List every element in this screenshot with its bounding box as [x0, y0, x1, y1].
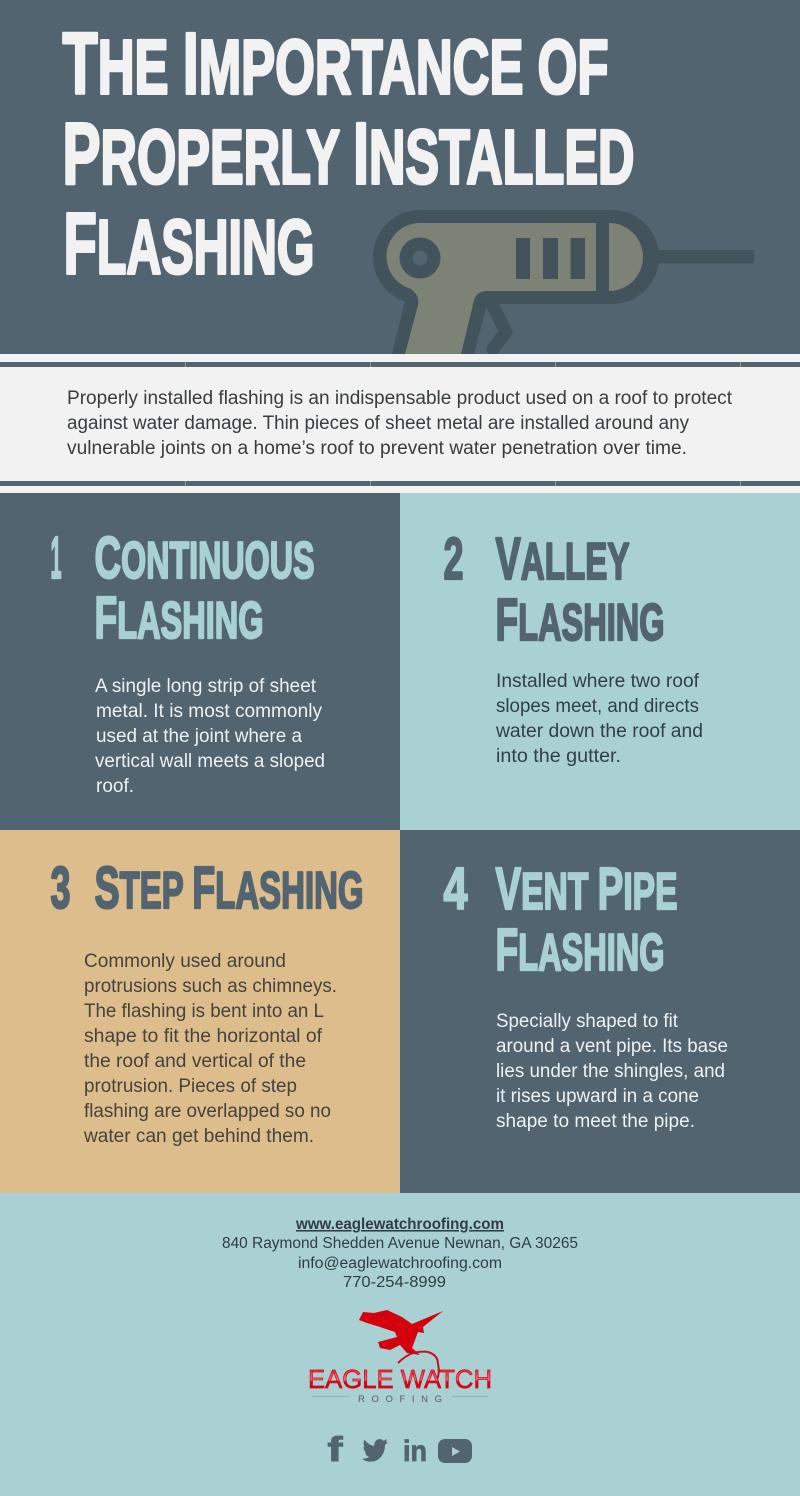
text: vent pipe flashing description: around a vent pipe. Its base	[496, 1036, 728, 1057]
text: step flashing description: protrusions such as chimneys.	[84, 976, 337, 997]
text: valley flashing description: into the gutter.	[496, 746, 621, 767]
text: vent pipe flashing description	[496, 1011, 728, 1132]
heading: 2 valley flashing: VALLEY	[496, 525, 630, 592]
text: valley flashing description: water down the roof and	[495, 721, 703, 742]
text: continuous flashing description	[95, 676, 325, 797]
title: PROPERLY INSTALLED	[62, 106, 634, 202]
text: step flashing description: flashing are overlapped so no	[84, 1101, 331, 1122]
heading: 1 continuous flashing	[50, 524, 314, 651]
title	[62, 16, 634, 292]
contact details: 840 Raymond Shedden Avenue Newnan, GA 30265	[222, 1235, 578, 1252]
title: THE IMPORTANCE OF	[62, 16, 608, 112]
contact details: info@eaglewatchroofing.com	[298, 1255, 502, 1272]
panel: footer	[0, 1193, 800, 1496]
heading: 4 vent pipe flashing: VENT PIPE	[496, 855, 678, 922]
text: step flashing description: protrusion. Pieces of step	[84, 1076, 297, 1097]
heading: 1 continuous flashing: FLASHING	[94, 584, 264, 651]
text: continuous flashing description: A single long strip of sheet	[95, 676, 317, 697]
text: valley flashing description	[495, 671, 703, 767]
text: continuous flashing description: used at the joint where a	[96, 726, 302, 747]
heading: 2 valley flashing: FLASHING	[496, 586, 664, 653]
intro panel	[0, 362, 800, 486]
heading: 4 vent pipe flashing: 4	[444, 855, 468, 922]
intro text: against water damage. Thin pieces of sheet metal are installed around any	[67, 413, 689, 434]
heading: 4 vent pipe flashing	[444, 855, 678, 983]
text: continuous flashing description: metal. It is most commonly	[96, 701, 322, 722]
text: vent pipe flashing description: lies under the shingles, and	[496, 1061, 725, 1082]
icon: linkedin: in	[403, 1435, 427, 1468]
text: continuous flashing description: vertical wall meets a sloped	[95, 751, 325, 772]
text: continuous flashing description: roof.	[96, 776, 134, 797]
contact details	[222, 1216, 578, 1291]
icon: facebook: f	[328, 1431, 343, 1469]
heading: 3 step flashing	[50, 854, 364, 921]
social icons	[328, 1431, 472, 1469]
contact details: www.eaglewatchroofing.com	[295, 1216, 504, 1233]
intro text	[67, 388, 733, 459]
heading: 4 vent pipe flashing: FLASHING	[496, 916, 664, 983]
icon: caulk gun	[373, 210, 754, 362]
icon: youtube	[438, 1439, 472, 1463]
text: step flashing description: shape to fit the horizontal of	[84, 1026, 323, 1047]
panel: continuous flashing	[0, 493, 400, 830]
text: step flashing description: water can get behind them.	[83, 1126, 314, 1147]
text: step flashing description	[83, 951, 337, 1147]
panel: vent pipe flashing	[400, 830, 800, 1193]
header panel	[0, 0, 800, 362]
text: vent pipe flashing description: shape to meet the pipe.	[496, 1111, 695, 1132]
title: FLASHING	[64, 196, 314, 292]
text: vent pipe flashing description: it rises upward in a cone	[496, 1086, 699, 1107]
heading: 3 step flashing: 3	[50, 854, 70, 921]
text: step flashing description: The flashing is bent into an L	[84, 1001, 324, 1022]
text: vent pipe flashing description: Specially shaped to fit	[496, 1011, 679, 1032]
contact details: 770-254-8999	[343, 1274, 446, 1291]
panel: step flashing	[0, 830, 400, 1193]
heading: 2 valley flashing	[444, 525, 664, 653]
text: valley flashing description: slopes meet, and directs	[496, 696, 699, 717]
heading: 1 continuous flashing: CONTINUOUS	[94, 524, 314, 591]
heading: 2 valley flashing: 2	[444, 525, 464, 592]
logo: eagle watch roofing: ROOFING	[358, 1394, 442, 1405]
text: valley flashing description: Installed where two roof	[496, 671, 700, 692]
heading: 1 continuous flashing: 1	[50, 524, 62, 591]
text: step flashing description: Commonly used around	[84, 951, 286, 972]
icon: twitter	[363, 1440, 387, 1461]
text: step flashing description: the roof and vertical of the	[84, 1051, 306, 1072]
heading: 3 step flashing: STEP FLASHING	[94, 854, 364, 921]
intro text: vulnerable joints on a home’s roof to prevent water penetration over time.	[67, 438, 687, 459]
logo: eagle watch roofing	[308, 1310, 492, 1405]
intro text: Properly installed flashing is an indispensable product used on a roof to protect	[67, 388, 733, 409]
logo: eagle watch roofing: EAGLE WATCH	[308, 1366, 492, 1394]
panel: valley flashing	[400, 493, 800, 830]
